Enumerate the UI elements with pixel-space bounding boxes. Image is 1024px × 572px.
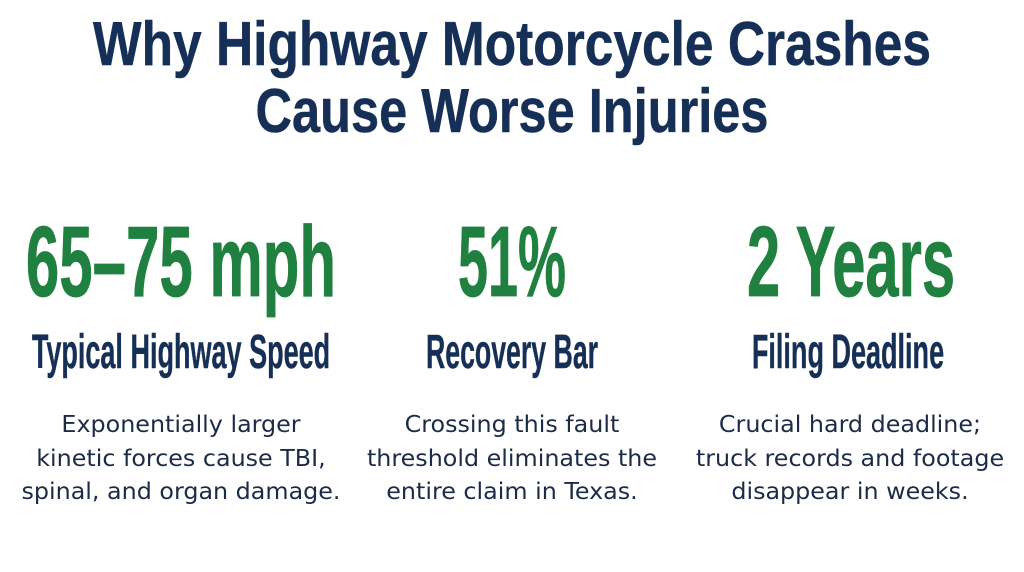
panel: highway speed bbox=[21, 206, 340, 505]
heading: typical highway speed: Typical Highway Speed bbox=[32, 326, 330, 379]
heading: recovery bar: Recovery Bar bbox=[426, 326, 598, 379]
text: speed description bbox=[21, 412, 340, 505]
title: Why Highway Motorcycle Crashes bbox=[93, 10, 931, 79]
text: deadline description: truck records and footage bbox=[696, 446, 1004, 472]
text: recovery description: Crossing this fault bbox=[405, 412, 619, 438]
text: deadline description bbox=[696, 412, 1004, 505]
text: recovery description: threshold eliminates the bbox=[367, 446, 657, 472]
panel: filing deadline bbox=[696, 206, 1004, 505]
title bbox=[92, 10, 931, 146]
text: recovery description: entire claim in Texas. bbox=[386, 479, 638, 505]
text: deadline description: Crucial hard deadline; bbox=[719, 412, 981, 438]
heading: filing deadline: Filing Deadline bbox=[752, 326, 944, 379]
stat: 2 Years: 2 Years bbox=[747, 206, 955, 318]
stat: 51%: 51% bbox=[458, 206, 566, 318]
panel: recovery bar bbox=[367, 206, 657, 505]
title: Cause Worse Injuries bbox=[256, 77, 768, 146]
stat: 65–75 mph: 65–75 mph bbox=[26, 206, 336, 318]
text: deadline description: disappear in weeks. bbox=[731, 479, 969, 505]
text: speed description: kinetic forces cause TBI, bbox=[36, 446, 326, 472]
text: speed description: Exponentially larger bbox=[61, 412, 301, 438]
text: speed description: spinal, and organ damage. bbox=[21, 479, 340, 505]
text: recovery description bbox=[367, 412, 657, 505]
